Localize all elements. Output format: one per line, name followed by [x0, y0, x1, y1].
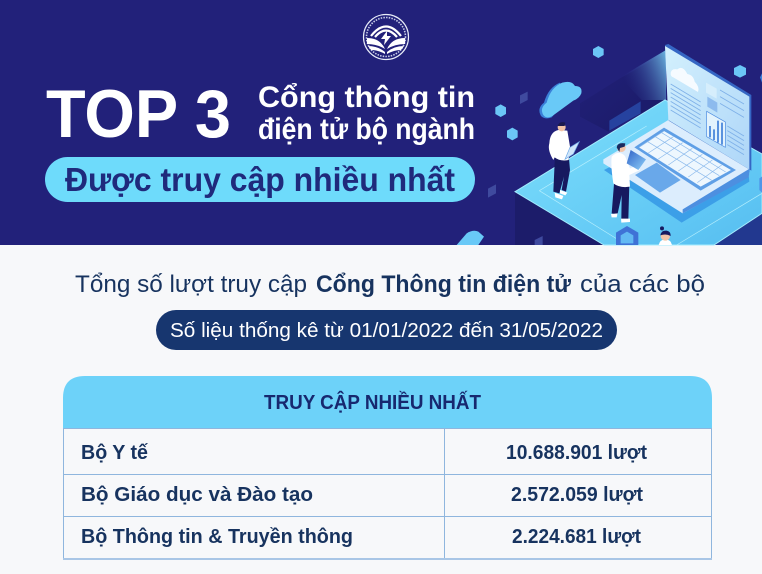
row: Bộ Thông tin & Truyền thông: 2.224.681 lượt [512, 526, 641, 548]
cube on platform [616, 226, 638, 245]
person standing with tablet [549, 122, 579, 199]
dark tower under platform right [713, 213, 762, 245]
table: truy cập nhiều nhất [63, 376, 712, 559]
logo emblem [364, 14, 408, 60]
title: TOP 3: TOP 3 [46, 76, 231, 152]
row: Bộ Thông tin & Truyền thông: Bộ Thông tin & Truyền thông [81, 526, 353, 548]
title: Cổng thông tin: Cổng thông tin [258, 81, 475, 114]
screen bar chart [707, 111, 725, 147]
table header: TRUY CẬP NHIỀU NHẤT [264, 390, 481, 414]
person bottom head [659, 226, 672, 245]
title: điện tử bộ ngành: điện tử bộ ngành [258, 113, 475, 146]
screen glow [620, 50, 666, 100]
row: Bộ Giáo dục và Đào tạo: Bộ Giáo dục và Đào tạo [81, 484, 313, 506]
laptop keyboard [634, 128, 736, 191]
banner background [0, 0, 762, 245]
table header [63, 376, 712, 428]
date range pill [156, 310, 617, 350]
floating cloud [539, 82, 582, 118]
laptop shadow [604, 163, 749, 223]
floating cubes [593, 46, 604, 58]
dark block behind laptop [580, 53, 665, 132]
blue block behind laptop [609, 101, 641, 131]
pill: Được truy cập nhiều nhất: Được truy cập nhiều nhất [65, 161, 455, 198]
screen tiles [706, 83, 717, 99]
row: Bộ Giáo dục và Đào tạo: 2.572.059 lượt [511, 484, 643, 506]
screen cloud [671, 68, 699, 92]
dim squares [520, 92, 528, 104]
cloud bottom left [457, 231, 484, 245]
date range pill: Số liệu thống kê từ 01/01/2022 đến 31/05/2022 [170, 320, 603, 342]
platform inset lines [539, 126, 762, 245]
screen text lines [671, 84, 744, 155]
row: Bộ Y tế [81, 442, 647, 464]
illustration: isometric laptop scene [457, 44, 762, 245]
table grid [63, 428, 712, 559]
platform top [515, 100, 762, 245]
laptop base [603, 120, 750, 213]
subtitle: Cổng Thông tin điện tử [316, 271, 572, 298]
subtitle [75, 271, 705, 298]
row: Bộ Y tế: 10.688.901 lượt [506, 442, 647, 464]
laptop touchpad [635, 163, 681, 193]
subtitle: Tổng số lượt truy cập [75, 271, 307, 298]
laptop screen [665, 44, 751, 171]
row: Bộ Giáo dục và Đào tạo [81, 484, 643, 506]
dark tower under platform left [515, 193, 604, 245]
row: Bộ Y tế: Bộ Y tế [81, 442, 149, 464]
person with laptop tablet [611, 143, 646, 223]
row: Bộ Thông tin & Truyền thông [81, 526, 641, 548]
subtitle: của các bộ [580, 271, 705, 298]
